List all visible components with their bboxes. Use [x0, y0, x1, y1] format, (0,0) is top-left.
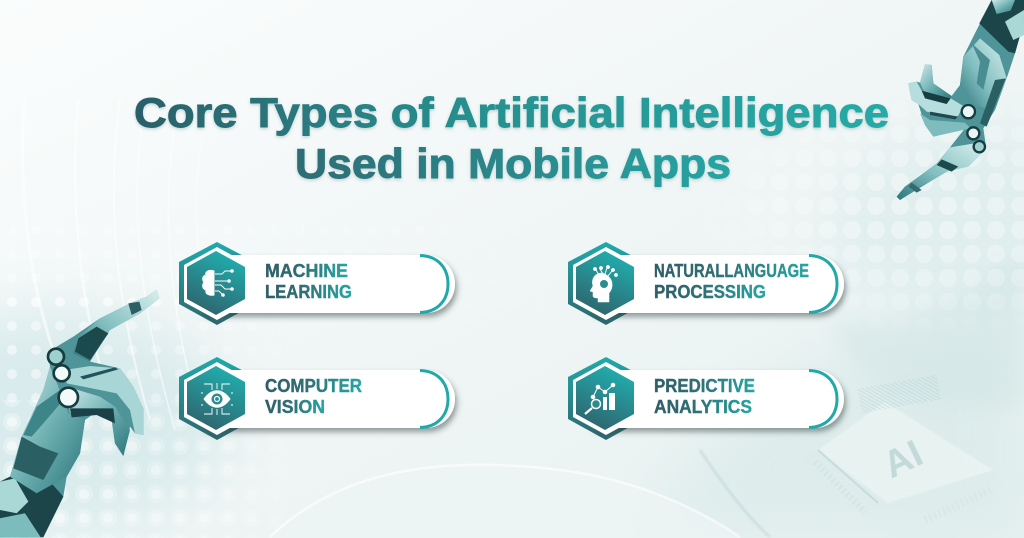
- label: PROCESSING: [654, 282, 766, 302]
- label: PREDICTIVE: [654, 376, 755, 396]
- label: [265, 376, 362, 417]
- card: machine learning: [179, 242, 455, 325]
- label: [654, 261, 809, 302]
- icon: eye circuit: [201, 383, 233, 415]
- hexagon frame: [568, 242, 644, 325]
- AI chip watermark: [815, 375, 993, 520]
- icon: chart with magnifier: [585, 383, 615, 414]
- pill: [205, 255, 455, 313]
- label: [654, 376, 755, 417]
- label: MACHINE: [265, 261, 348, 281]
- AI chip watermark: AI: [877, 433, 929, 487]
- label: [265, 261, 352, 302]
- title: Used in Mobile Apps: [295, 140, 731, 187]
- pill: [594, 370, 844, 428]
- robot hand: top right: [897, 0, 1024, 200]
- pill: [205, 370, 455, 428]
- pill: [594, 255, 844, 313]
- hexagon frame: [179, 357, 255, 440]
- title: [134, 89, 889, 187]
- card: computer vision: [179, 357, 455, 440]
- label: VISION: [265, 397, 325, 417]
- hexagon frame: [179, 242, 255, 325]
- label: LEARNING: [265, 282, 352, 302]
- card: predictive analytics: [568, 357, 844, 440]
- label: COMPUTER: [265, 376, 362, 396]
- title: Core Types of Artificial Intelligence: [134, 89, 889, 136]
- robot hand: bottom left: [0, 290, 159, 537]
- icon: head: [590, 266, 617, 302]
- label: ANALYTICS: [654, 397, 752, 417]
- hexagon frame: [568, 357, 644, 440]
- label: NATURALLANGUAGE: [654, 261, 809, 281]
- icon: brain circuit: [203, 270, 233, 296]
- card: natural language processing: [568, 242, 844, 325]
